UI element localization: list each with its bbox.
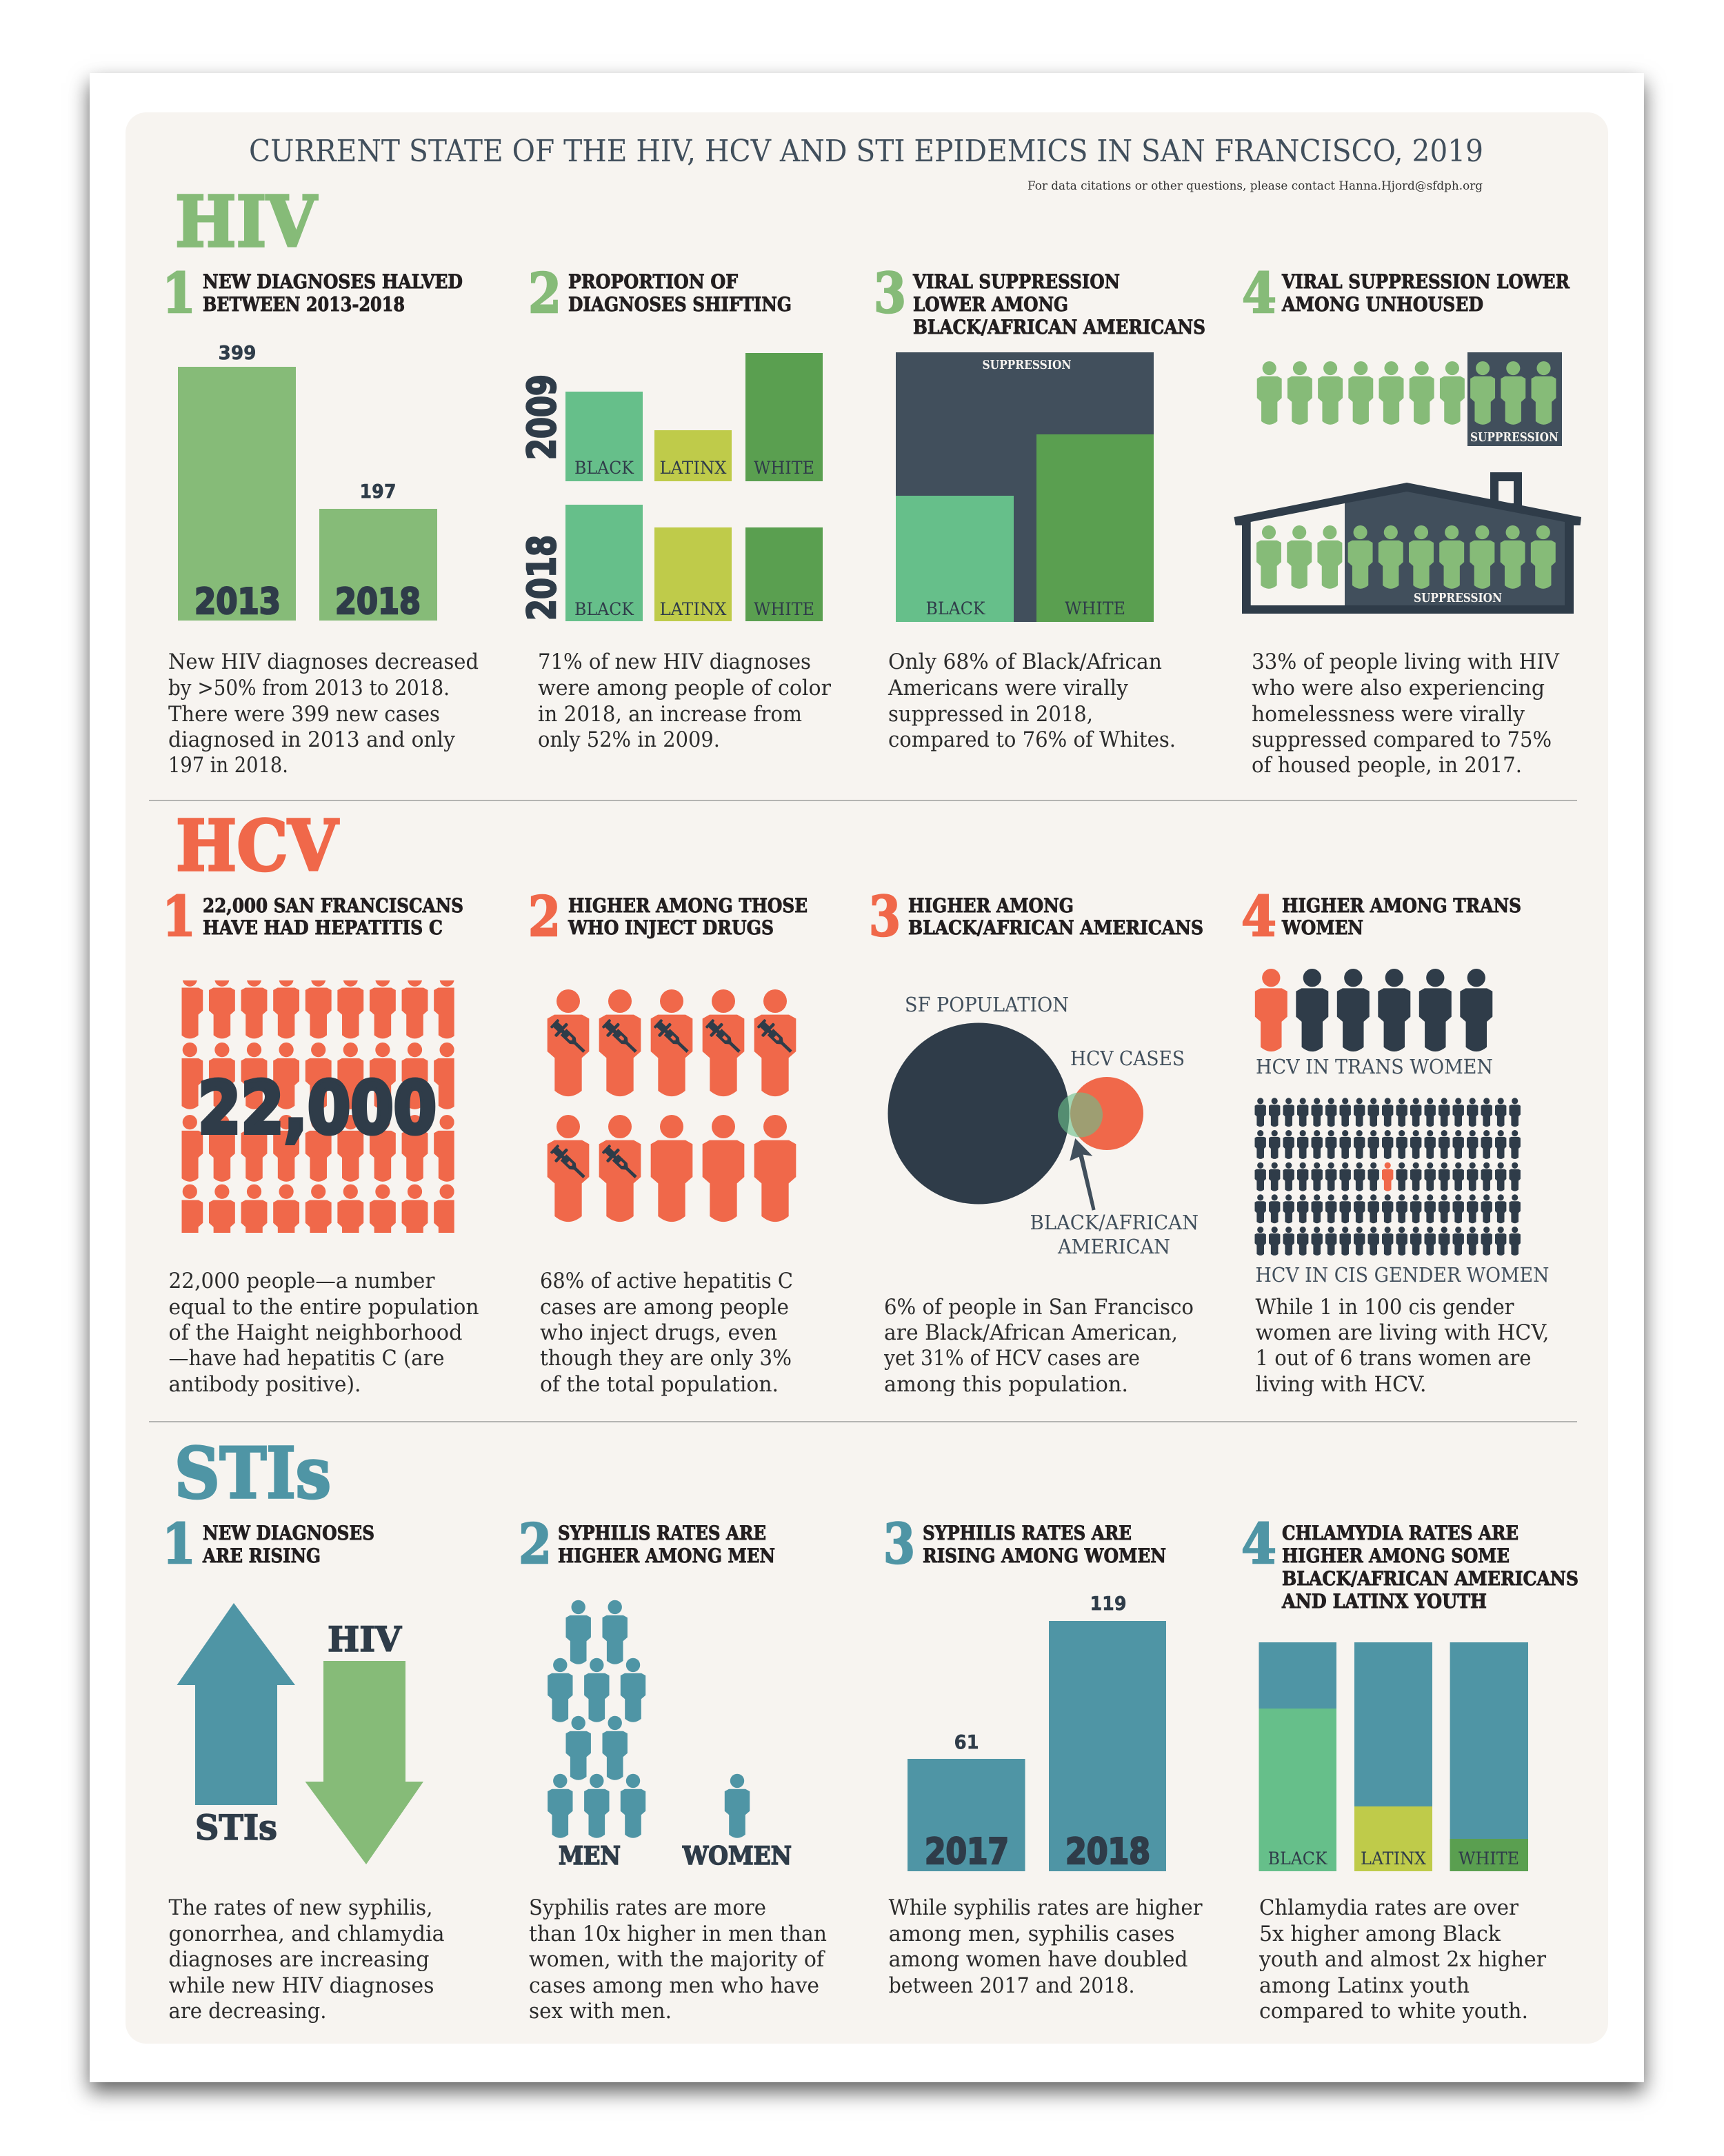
area chart: BLACK [925, 598, 986, 618]
number 4: 4 [1241, 1511, 1276, 1576]
HIV section title: HIV [175, 181, 318, 263]
STI panel 2: syphilis among men [519, 1511, 827, 2024]
description: of housed people, in 2017. [1252, 753, 1522, 778]
description: While 1 in 100 cis gender [1255, 1295, 1514, 1320]
HIV panel 3: viral suppression by race [874, 261, 1205, 752]
description: 197 in 2018. [168, 753, 288, 778]
STI panel 3: syphilis among women [883, 1511, 1203, 1998]
description: yet 31% of HCV cases are [883, 1346, 1140, 1371]
description: homelessness were virally [1252, 702, 1525, 727]
bar chart 2017 vs 2018: 119 [1090, 1592, 1127, 1615]
bar chart 2017 vs 2018: 2018 [1065, 1831, 1150, 1873]
description: 68% of active hepatitis C [540, 1269, 793, 1293]
description: diagnosed in 2013 and only [168, 727, 455, 752]
description [889, 1895, 1203, 1998]
description: among this population. [884, 1372, 1128, 1397]
STI panel 1: new diagnoses rising [162, 1511, 444, 2024]
description: Chlamydia rates are over [1259, 1895, 1518, 1920]
stacked bars: BLACK [1268, 1848, 1328, 1868]
heading [202, 1522, 374, 1567]
stacked bars: LATINX [1361, 1848, 1426, 1868]
bar chart 2013 vs 2018: 399 [218, 341, 257, 364]
pictogram: men: MEN [559, 1842, 621, 1871]
description: equal to the entire population [168, 1295, 479, 1320]
heading [1281, 1522, 1578, 1613]
description: are Black/African American, [884, 1320, 1178, 1345]
description: 33% of people living with HIV [1252, 649, 1560, 674]
heading: HIGHER AMONG THOSE [568, 894, 808, 917]
description: cases are among people [540, 1295, 789, 1320]
bar chart 2009 [520, 353, 823, 481]
heading: HIGHER AMONG SOME [1282, 1544, 1510, 1567]
pictogram: house with housed people [1234, 472, 1581, 614]
description: among women have doubled [889, 1947, 1188, 1972]
venn diagram: BLACK/AFRICAN [1030, 1211, 1199, 1234]
description: than 10x higher in men than [529, 1922, 827, 1946]
heading: WOMEN [1281, 916, 1363, 939]
pictogram: unhoused people: SUPPRESSION [1470, 430, 1558, 445]
STI panel 4: chlamydia [1241, 1511, 1578, 2024]
description: who inject drugs, even [540, 1320, 777, 1345]
bar chart 2009: LATINX [659, 458, 727, 478]
bar chart 2013 vs 2018 [178, 341, 437, 623]
heading: NEW DIAGNOSES HALVED [203, 270, 463, 293]
stacked bars [1259, 1642, 1528, 1871]
bar chart 2017 vs 2018: 2017 [925, 1831, 1009, 1873]
number 2: 2 [528, 884, 561, 949]
heading [558, 1522, 775, 1567]
heading [1281, 894, 1521, 939]
number 1: 1 [162, 884, 196, 949]
description: while new HIV diagnoses [168, 1973, 434, 1998]
description: only 52% in 2009. [538, 727, 720, 752]
heading: AMONG UNHOUSED [1281, 293, 1483, 316]
heading: SYPHILIS RATES ARE [558, 1522, 766, 1544]
pictogram: cis gender women [1255, 1098, 1549, 1287]
description: by >50% from 2013 to 2018. [168, 676, 450, 701]
venn diagram: HCV CASES [1070, 1047, 1185, 1070]
heading: LOWER AMONG [913, 293, 1068, 316]
stacked bars: WHITE [1459, 1848, 1519, 1868]
venn diagram [888, 993, 1199, 1258]
heading: BLACK/AFRICAN AMERICANS [1282, 1567, 1578, 1590]
heading: BLACK/AFRICAN AMERICANS [908, 916, 1203, 939]
heading [923, 1522, 1166, 1567]
number 3: 3 [869, 884, 901, 949]
description: There were 399 new cases [168, 702, 440, 727]
pictogram: women: WOMEN [682, 1842, 792, 1871]
number 1: 1 [162, 261, 196, 325]
heading: BLACK/AFRICAN AMERICANS [913, 316, 1205, 339]
description [168, 649, 479, 778]
description [168, 1269, 479, 1397]
infographic artwork [126, 112, 1608, 2044]
heading: HIGHER AMONG [908, 894, 1074, 917]
description: women are living with HCV, [1255, 1320, 1549, 1345]
description: though they are only 3% [540, 1346, 792, 1371]
description: Syphilis rates are more [529, 1895, 766, 1920]
description [529, 1895, 827, 2024]
bar chart 2009: 2009 [520, 374, 565, 460]
HCV section title: HCV [176, 805, 339, 887]
description: New HIV diagnoses decreased [168, 649, 479, 674]
heading: PROPORTION OF [568, 270, 738, 293]
heading [912, 270, 1205, 339]
description: in 2018, an increase from [538, 702, 802, 727]
pictogram: women [682, 1774, 792, 1871]
description: 6% of people in San Francisco [884, 1295, 1194, 1320]
arrow up: STIs [177, 1603, 295, 1848]
bar chart 2013 vs 2018: 197 [360, 480, 396, 503]
area chart: WHITE [1065, 598, 1125, 618]
heading [568, 894, 808, 939]
description: who were also experiencing [1252, 676, 1545, 701]
description [888, 649, 1176, 752]
cream content panel [126, 112, 1608, 2044]
big number: 22,000 [198, 1066, 437, 1150]
bar chart 2018: BLACK [574, 599, 634, 619]
description: gonorrhea, and chlamydia [168, 1922, 444, 1946]
number 2: 2 [519, 1511, 552, 1576]
bar chart 2013 vs 2018: 2013 [194, 581, 281, 623]
section: STIs [162, 1432, 1578, 2024]
heading: CHLAMYDIA RATES ARE [1282, 1522, 1518, 1544]
heading [203, 270, 463, 316]
description: were among people of color [538, 676, 831, 701]
description [168, 1895, 444, 2024]
description: Americans were virally [888, 676, 1128, 701]
description: 1 out of 6 trans women are [1255, 1346, 1531, 1371]
bar chart 2018 [520, 505, 823, 621]
venn diagram: SF POPULATION [905, 993, 1069, 1016]
heading: 22,000 SAN FRANCISCANS [203, 894, 463, 917]
description [1255, 1295, 1549, 1397]
heading: BETWEEN 2013-2018 [203, 293, 405, 316]
pictogram: house with housed people: SUPPRESSION [1414, 591, 1502, 605]
description [1252, 649, 1560, 778]
arrow down: HIV [305, 1619, 423, 1864]
description: —have had hepatitis C (are [168, 1346, 444, 1371]
description: 71% of new HIV diagnoses [538, 649, 811, 674]
description: compared to white youth. [1259, 1999, 1528, 2024]
description: compared to 76% of Whites. [888, 727, 1176, 752]
number 4: 4 [1241, 884, 1276, 949]
description: The rates of new syphilis, [168, 1895, 433, 1920]
heading: VIRAL SUPPRESSION LOWER [1281, 270, 1570, 293]
venn diagram: AMERICAN [1057, 1235, 1170, 1258]
number 4: 4 [1242, 261, 1276, 325]
bar chart 2017 vs 2018: 61 [954, 1731, 979, 1753]
description: While syphilis rates are higher [889, 1895, 1203, 1920]
HIV panel 4: viral suppression unhoused [1234, 261, 1581, 778]
bar chart 2013 vs 2018: 2018 [335, 581, 421, 623]
bar chart 2009: WHITE [754, 458, 814, 478]
section: HIV [162, 181, 1581, 778]
heading: RISING AMONG WOMEN [923, 1544, 1166, 1567]
description: suppressed compared to 75% [1252, 727, 1552, 752]
HIV panel 2: proportion of diagnoses [520, 261, 831, 752]
number 3: 3 [874, 261, 906, 325]
number 3: 3 [883, 1511, 915, 1576]
description: among men, syphilis cases [889, 1922, 1175, 1946]
number 2: 2 [528, 261, 561, 325]
STIs section title: STIs [174, 1432, 331, 1514]
heading: VIRAL SUPPRESSION [912, 270, 1120, 293]
area chart [896, 352, 1154, 622]
HCV panel 2: injection drug use [528, 884, 808, 1397]
area chart: SUPPRESSION [982, 358, 1072, 372]
heading: HIGHER AMONG MEN [558, 1544, 775, 1567]
description: women, with the majority of [529, 1947, 825, 1972]
description [538, 649, 831, 752]
section: HCV [162, 805, 1549, 1397]
pictogram: people with syringes [548, 989, 797, 1222]
contact note: For data citations or other questions, please contact Hanna.Hjord@sfdph.org [1028, 179, 1483, 193]
heading: DIAGNOSES SHIFTING [568, 293, 792, 316]
heading: HAVE HAD HEPATITIS C [203, 916, 443, 939]
description: Only 68% of Black/African [888, 649, 1162, 674]
description: youth and almost 2x higher [1259, 1947, 1546, 1972]
description: sex with men. [529, 1999, 672, 2024]
HCV panel 1: 22,000 San Franciscans [162, 884, 479, 1397]
heading: SYPHILIS RATES ARE [923, 1522, 1132, 1544]
description [883, 1295, 1194, 1397]
description: diagnoses are increasing [168, 1947, 429, 1972]
pictogram: cis gender women: HCV IN CIS GENDER WOMEN [1255, 1263, 1549, 1287]
HCV panel 3: Black/African Americans [869, 884, 1203, 1397]
pictogram: trans women: HCV IN TRANS WOMEN [1256, 1055, 1493, 1078]
main title: CURRENT STATE OF THE HIV, HCV AND STI EPIDEMICS IN SAN FRANCISCO, 2019 [249, 134, 1483, 169]
bar chart 2018: 2018 [520, 535, 565, 621]
pictogram: men [548, 1600, 645, 1871]
description: cases among men who have [529, 1973, 819, 1998]
pictogram: trans women [1255, 969, 1493, 1078]
bar chart 2018: LATINX [659, 599, 727, 619]
heading: HIGHER AMONG TRANS [1282, 894, 1521, 917]
heading: WHO INJECT DRUGS [568, 916, 774, 939]
heading [1281, 270, 1570, 316]
heading [203, 894, 463, 939]
description: of the Haight neighborhood [168, 1320, 462, 1345]
bar chart 2018: WHITE [754, 599, 814, 619]
description: are decreasing. [168, 1999, 327, 2024]
heading: NEW DIAGNOSES [203, 1522, 374, 1544]
heading [568, 270, 792, 316]
description: 5x higher among Black [1259, 1922, 1501, 1946]
HCV panel 4: trans women [1241, 884, 1549, 1397]
description [1259, 1895, 1546, 2024]
pictogram: people grid [182, 980, 454, 1233]
heading: ARE RISING [202, 1544, 321, 1567]
description: among Latinx youth [1259, 1973, 1470, 1998]
description: between 2017 and 2018. [889, 1973, 1135, 1998]
description: antibody positive). [168, 1372, 361, 1397]
HIV panel 1: new diagnoses [162, 261, 479, 778]
arrow to overlap [1070, 1139, 1095, 1210]
description [540, 1269, 793, 1397]
arrow down: HIV: HIV [328, 1619, 402, 1660]
arrow up: STIs: STIs [195, 1807, 277, 1848]
number 1: 1 [162, 1511, 196, 1576]
pictogram: unhoused people [1257, 352, 1562, 446]
description: suppressed in 2018, [888, 702, 1093, 727]
description: living with HCV. [1255, 1372, 1426, 1397]
bar chart 2017 vs 2018 [908, 1592, 1166, 1873]
description: of the total population. [540, 1372, 779, 1397]
heading [908, 894, 1203, 939]
heading: AND LATINX YOUTH [1281, 1590, 1487, 1613]
bar chart 2009: BLACK [574, 458, 634, 478]
description: 22,000 people—a number [168, 1269, 435, 1293]
